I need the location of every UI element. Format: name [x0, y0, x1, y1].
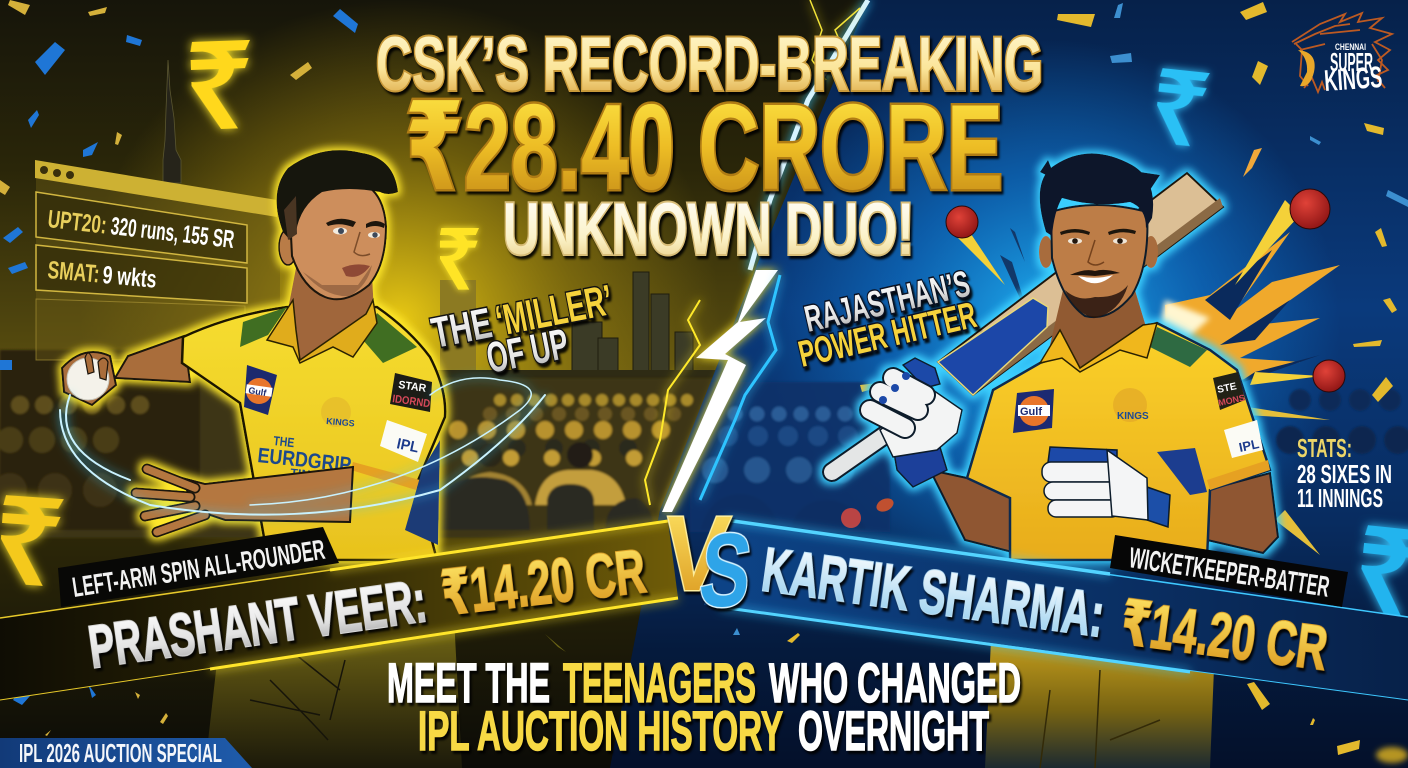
callout: The Miller of UP: [428, 276, 617, 383]
sleeve badge: Star: MONS: [1217, 393, 1246, 408]
title line 3: UNKNOWN DUO!: [503, 189, 914, 270]
lion jaw: [1298, 50, 1315, 86]
shirt sponsor text: [256, 433, 352, 483]
sleeve badge: Star: STE: [1216, 381, 1238, 396]
icon: rupee lower right: [1357, 525, 1408, 619]
tag: IPL 2026 auction special: [0, 738, 252, 768]
player price: ₹14.20 CR: [438, 537, 649, 629]
viewer-right arm: [1170, 473, 1278, 553]
jersey: [967, 323, 1270, 560]
shirt logo: Gulf: Gulf: [1020, 406, 1042, 418]
callout: The Miller of UP: ‘MILLER’: [492, 276, 617, 346]
nose and mouth: [354, 232, 370, 256]
lion mane: [1292, 13, 1392, 92]
skyline: left city towers: [438, 272, 715, 380]
stats board title bar: [35, 160, 277, 217]
lower arm: [182, 467, 353, 522]
raised arm: [115, 336, 190, 382]
icon: rupee top right: [1153, 68, 1210, 148]
stat row: SMAT: 9 wkts: [101, 261, 158, 294]
viewer-left arm: [930, 470, 1012, 552]
title: main headline: [376, 22, 1043, 270]
burst behind player: [827, 228, 1340, 570]
stat row: UPT20: [36, 192, 247, 263]
beard: [1065, 285, 1128, 318]
crowd: right audience: [690, 382, 1400, 532]
shirt logo: CSK crest: [321, 397, 355, 428]
top glove: [870, 358, 962, 487]
stat row: SMAT: SMAT:: [46, 256, 101, 289]
shoulder patches: [240, 307, 287, 347]
hand holding ball: [62, 352, 116, 405]
collar: [267, 300, 377, 363]
hair: [277, 150, 398, 240]
lower torso: [985, 640, 1214, 768]
callout: Rajasthan's Power Hitter: RAJASTHAN’S: [801, 263, 974, 340]
confetti: gold pieces left: [0, 0, 566, 736]
callout: The Miller of UP: OF UP: [483, 320, 572, 383]
VS emblem: S: [695, 513, 757, 629]
callout: Rajasthan's Power Hitter: [795, 263, 980, 375]
face: [1051, 205, 1147, 317]
bat handle: [832, 428, 895, 472]
neck: [1050, 290, 1147, 372]
panel: right blue background: [600, 0, 1408, 768]
hair: [1040, 154, 1153, 236]
sleeve badge: IPL: IPL: [1238, 436, 1260, 455]
banner: Kartik Sharma price: [704, 520, 1408, 700]
ear: [279, 229, 297, 265]
eyes, brows, smile: [1060, 229, 1136, 235]
hand fingers: [136, 469, 205, 532]
VS emblem: V: [658, 494, 734, 613]
blue side panel: [1157, 448, 1207, 495]
icon: Burj tower silhouette: [163, 60, 181, 183]
orange sleeve band: [351, 462, 420, 490]
face: [290, 178, 386, 299]
sleeve badge: Star: [390, 373, 432, 412]
tag: left-arm spin all-rounder: LEFT-ARM SPIN ALL-ROUNDER: [70, 534, 327, 603]
callout: Rajasthan's Power Hitter: POWER HITTER: [795, 294, 980, 375]
player name: KARTIK SHARMA:: [758, 536, 1108, 651]
title line 2: ₹28.40 CRORE: [405, 79, 1003, 215]
headline: teenagers subtitle: [387, 651, 1021, 762]
motion swirl: [60, 378, 545, 515]
tag: left-arm spin all-rounder: [58, 527, 339, 607]
panel: left yellow background: [0, 0, 880, 768]
flying balls with trails: [841, 189, 1345, 528]
player name: PRASHANT VEER:: [84, 567, 431, 681]
sleeve badge: IPL: [1224, 420, 1263, 458]
icon: rupee left centre: [440, 228, 479, 290]
sleeve badge: IPL: IPL: [395, 435, 420, 456]
logo wordmark: CHENNAI: [1335, 42, 1366, 52]
banner: Prashant Veer price: [0, 521, 678, 700]
arm stripe: [405, 440, 440, 545]
stat row: SMAT: [36, 245, 247, 303]
confetti: blue pieces right: [733, 3, 1408, 635]
shirt logo: CSK crest: KINGS: [326, 416, 355, 428]
callout: stats for Kartik: STATS:: [1297, 433, 1352, 463]
icon: rupee top left: [190, 40, 253, 130]
stat row: UPT20: 320 runs, 155 SR: [109, 212, 236, 254]
collar: [1040, 323, 1157, 372]
jersey: [182, 307, 445, 560]
tag: IPL 2026 auction special: IPL 2026 AUCTION SPECIAL: [19, 738, 222, 768]
eyes and brows: [326, 219, 385, 228]
player lower torso: [205, 580, 462, 768]
headline: teenagers subtitle: TEENAGERS: [563, 651, 756, 714]
callout: The Miller of UP: THE: [428, 299, 496, 358]
ears: [1039, 236, 1053, 268]
headline: teenagers subtitle: OVERNIGHT: [798, 699, 989, 762]
shirt sponsor text: TINGS: [290, 467, 329, 483]
confetti: gold pieces right: [787, 2, 1408, 763]
headline: teenagers subtitle: IPL AUCTION HISTORY: [418, 699, 783, 762]
shirt logo: CSK crest: [1113, 388, 1149, 422]
shirt sponsor text: EURDGRIP: [256, 444, 352, 477]
shirt logo: Gulf: [1013, 389, 1054, 433]
bat: [938, 173, 1223, 395]
headline: teenagers subtitle: MEET THE: [387, 651, 550, 714]
player: Prashant Veer illustration: [60, 150, 545, 768]
confetti: blue pieces left: [0, 9, 358, 753]
stat row: UPT20: UPT20:: [46, 205, 108, 240]
shirt logo: Gulf: Gulf: [248, 385, 268, 398]
neck: [285, 268, 374, 362]
player: Kartik Sharma illustration: [827, 154, 1345, 768]
lightning divider: [645, 0, 868, 512]
shirt logo: Gulf: [244, 365, 277, 415]
shirt sponsor text: THE: [273, 433, 295, 450]
headline: teenagers subtitle: WHO CHANGED: [769, 651, 1021, 714]
orange sleeve band: [1207, 460, 1270, 490]
crowd: left audience: [0, 350, 760, 538]
shirt logo: CSK crest: KINGS: [1117, 411, 1149, 422]
sleeve badge: Star: IDORND: [392, 393, 431, 410]
sleeve badge: Star: STAR: [398, 379, 427, 395]
logo wordmark: [1323, 42, 1383, 98]
title line 1: CSK’S RECORD-BREAKING: [376, 22, 1043, 107]
callout: stats for Kartik: [1297, 433, 1392, 513]
tag: wicketkeeper-batter: [1110, 535, 1348, 607]
sleeve badge: Star: [1213, 372, 1246, 410]
front glove: [1042, 447, 1170, 527]
logo: Chennai Super Kings: [1292, 13, 1392, 98]
ball: [67, 358, 109, 400]
shoulder patch: [1150, 327, 1207, 367]
icon: rupee lower left: [0, 495, 64, 587]
panel: left stats board: [35, 160, 280, 360]
sleeve badge: IPL: [380, 420, 427, 462]
